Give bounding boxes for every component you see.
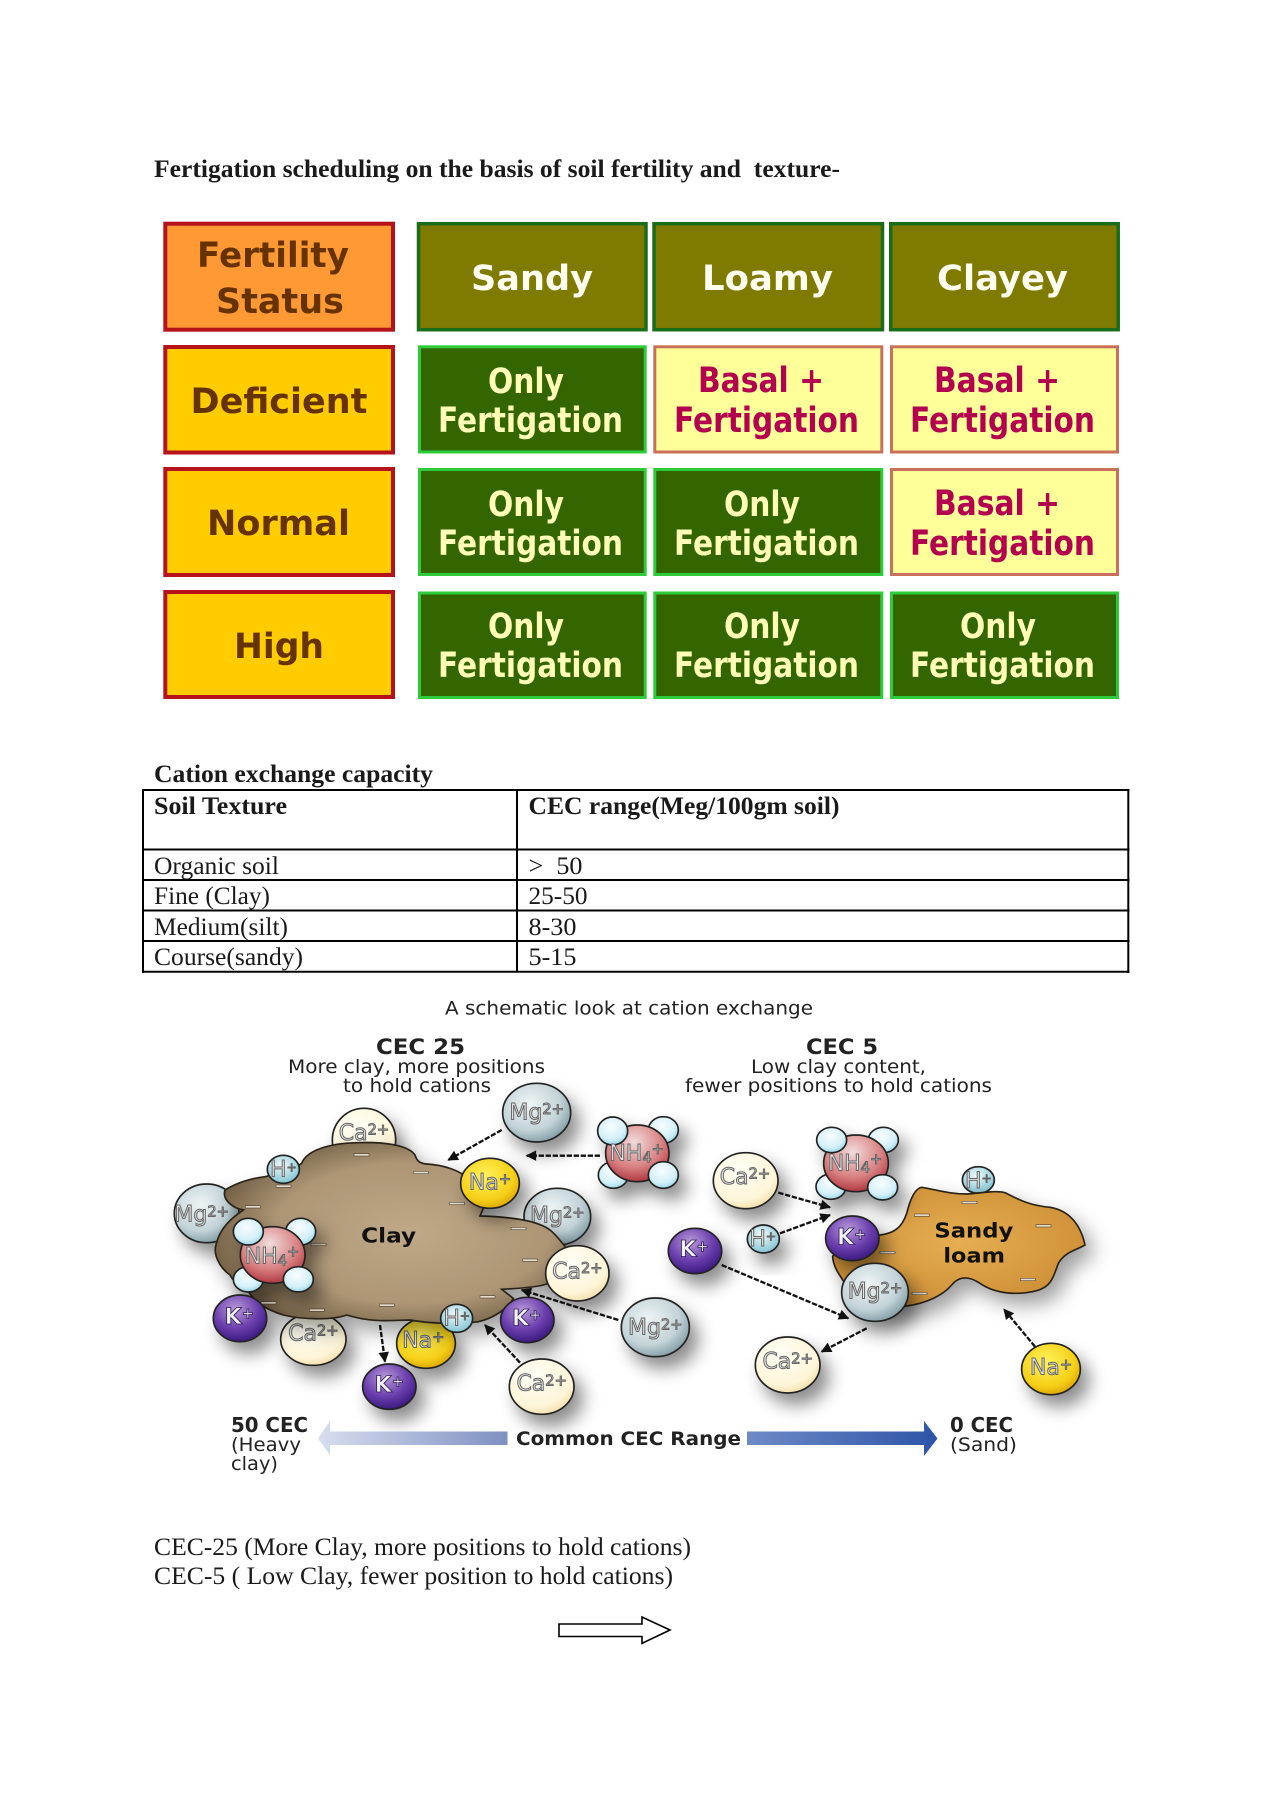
ion: Mg top: [503, 1083, 571, 1142]
table: CEC range by soil texture: 5-15: [528, 942, 576, 971]
ion: K+ right: [501, 1297, 554, 1343]
ion: Na+: Na: [1030, 1356, 1060, 1381]
arrow: Ca to sand: [778, 1193, 830, 1207]
ion: K+ bottom: [363, 1364, 416, 1409]
ion: Ca lower: [755, 1337, 820, 1393]
ion: H+ free: [747, 1225, 779, 1253]
scale label: 0 CEC sand: (Sand): [950, 1434, 1017, 1456]
heading: CEC 5 description: fewer positions to hold cations: [685, 1075, 992, 1097]
ion behind clay: Mg left: [174, 1184, 239, 1243]
ion: Ca right: Ca: [552, 1259, 581, 1284]
ion behind sand: H+: +: [982, 1172, 992, 1186]
cell: deficient loamy: Basal +: [698, 361, 824, 401]
cell: normal sandy: [420, 470, 645, 574]
heading: CEC 5 description: CEC 5: [806, 1035, 878, 1059]
table: CEC range by soil texture: [142, 790, 1130, 973]
cell: deficient clayey: Fertigation: [910, 401, 1095, 441]
heading: CEC 5 description: Low clay content,: [751, 1056, 926, 1078]
scale label: 0 CEC sand: [950, 1413, 1017, 1456]
arrow: Mg to Ca: [822, 1328, 867, 1352]
ion: H+ upper left: +: [287, 1160, 297, 1174]
table: CEC range by soil texture: 8-30: [528, 912, 576, 941]
ion: K+ right: K: [512, 1306, 529, 1331]
cell: high clayey: Only: [960, 607, 1036, 647]
panel: fertigation schedule matrix: [165, 224, 1118, 697]
cell: high clayey: Fertigation: [910, 646, 1095, 686]
heading: cation exchange capacity: Cation exchange capacity: [154, 759, 433, 788]
arrow: Na to sand: [1004, 1309, 1035, 1347]
cell: deficient clayey: [892, 347, 1118, 452]
ion: Ca upper: [713, 1153, 778, 1209]
ion: K+ lower left: +: [242, 1306, 254, 1323]
clay particle: [215, 1142, 570, 1323]
scale label: 50 CEC heavy clay: [231, 1413, 308, 1475]
scale label: 50 CEC heavy clay: clay): [231, 1453, 278, 1475]
ion: NH4+ free: 4: [642, 1150, 652, 1167]
ion: K+ bottom: +: [392, 1374, 404, 1391]
clay label: Clay: [361, 1224, 417, 1248]
heading: CEC 25 description: [288, 1035, 545, 1097]
ion: Mg top: Mg: [509, 1100, 542, 1125]
ion: NH4+: [816, 1127, 898, 1200]
table: CEC range by soil texture: Fine (Clay): [154, 881, 270, 910]
table: CEC range by soil texture: Organic soil: [154, 851, 279, 880]
arrow: Ca to clay: [485, 1325, 520, 1363]
cell: deficient sandy: Fertigation: [438, 401, 623, 441]
cell: high sandy: Fertigation: [438, 646, 623, 686]
ion: K+ bottom: K: [375, 1373, 392, 1398]
text block: CEC notes: CEC-5 ( Low Clay, fewer position to hold cations): [154, 1561, 673, 1590]
ion behind clay: Mg left: Mg: [174, 1203, 207, 1228]
cell: high loamy: Only: [724, 607, 800, 647]
ion: K+ right: +: [529, 1307, 541, 1324]
ion: Ca upper: Ca: [720, 1165, 749, 1190]
heading: CEC 5 description: [685, 1035, 992, 1097]
table: CEC range by soil texture: Medium(silt): [154, 912, 288, 941]
ion: NH4+ free: [598, 1117, 678, 1188]
cell: deficient loamy: [655, 347, 882, 452]
ion: NH4+: +: [870, 1151, 882, 1168]
cell: deficient clayey: Basal +: [934, 361, 1060, 401]
ion behind sand: H+: [962, 1167, 994, 1194]
ion: K+ free: +: [696, 1238, 709, 1255]
header: sandy: Sandy: [471, 259, 593, 299]
cell: normal loamy: Only: [724, 485, 800, 525]
scale label: 50 CEC heavy clay: 50 CEC: [231, 1413, 308, 1437]
arrow: K to sand: [722, 1265, 848, 1318]
ion: NH4+: 4: [861, 1160, 870, 1177]
ion: H+ upper left: [267, 1155, 299, 1183]
cell: normal sandy: Fertigation: [438, 524, 623, 564]
row label: high: High: [234, 627, 324, 667]
arrow: common CEC range left: [318, 1421, 508, 1455]
ion: Mg lower: Mg: [628, 1316, 661, 1341]
arrow: next page outline: [559, 1617, 670, 1643]
ion: H+ lower: [441, 1304, 473, 1332]
negative charges on sand: [880, 1201, 1051, 1295]
title: fertigation scheduling: Fertigation scheduling on the basis of soil fertility and texture-: [154, 154, 840, 183]
row label: normal: [165, 469, 393, 575]
cell: normal loamy: Fertigation: [674, 524, 859, 564]
ion: Na+: +: [1060, 1356, 1072, 1373]
ion behind clay: Ca top: Ca: [339, 1121, 368, 1146]
sandy loam label: Sandy: [934, 1218, 1014, 1242]
ion behind clay: Mg right: [524, 1188, 591, 1245]
table: CEC range by soil texture: 25-50: [528, 881, 588, 910]
diagram: sandy loam particle with cations: [668, 1127, 1085, 1395]
ion: Ca lower: 2+: [791, 1350, 813, 1367]
cell: high loamy: [655, 593, 882, 698]
cell: normal clayey: [892, 470, 1118, 574]
ion: NH4+ on clay: +: [287, 1244, 299, 1261]
table: CEC range by soil texture: Course(sandy): [154, 942, 303, 971]
ion: NH4+ free: NH: [609, 1142, 642, 1167]
arrow: Mg lower to clay: [522, 1290, 618, 1320]
ion: K+ free: [668, 1228, 722, 1274]
ion behind clay: Na bottom: Na: [402, 1328, 432, 1353]
cell: high loamy: Fertigation: [674, 646, 859, 686]
ion: K+ lower left: [213, 1295, 267, 1342]
row label: high: [165, 592, 393, 697]
ion behind clay: Mg right: Mg: [530, 1204, 563, 1229]
arrow: Mg to clay: [448, 1130, 502, 1160]
ion: H+ upper left: H: [270, 1158, 287, 1183]
ion: K+ on sand: +: [854, 1226, 866, 1243]
ion: Mg on sand: Mg: [848, 1279, 881, 1304]
ion: Ca upper: 2+: [749, 1166, 770, 1183]
ion behind clay: Ca top: [332, 1108, 396, 1172]
ion: H+ free: H: [749, 1227, 766, 1252]
ion behind sand: H+: H: [965, 1169, 982, 1194]
ion: NH4+ on clay: 4: [278, 1252, 287, 1269]
row label: normal: Normal: [207, 504, 350, 544]
diagram title: A schematic look at cation exchange: [445, 998, 813, 1020]
table: CEC range by soil texture: Soil Texture: [154, 791, 287, 820]
ion behind clay: Ca bottom: 2+: [317, 1322, 339, 1339]
row label: deficient: [165, 347, 393, 452]
ion: Ca lower: 2+: [545, 1372, 567, 1389]
sandy loam label: [934, 1218, 1014, 1268]
ion behind clay: Na bottom: +: [432, 1329, 444, 1346]
ion: K+ free: K: [679, 1238, 696, 1263]
heading: CEC 25 description: CEC 25: [376, 1035, 465, 1059]
header: loamy: Loamy: [702, 259, 833, 299]
text block: CEC notes: CEC-25 (More Clay, more positions to hold cations): [154, 1532, 691, 1561]
ion: NH4+ free: +: [652, 1141, 664, 1158]
ion: Mg lower: 2+: [661, 1316, 683, 1333]
ion: K+ on sand: [826, 1216, 879, 1261]
arrow: H to sand: [780, 1215, 830, 1233]
ion: Na+: [1022, 1343, 1080, 1395]
ion: H+ free: +: [766, 1230, 776, 1244]
cell: normal clayey: Fertigation: [910, 524, 1095, 564]
cell: high sandy: Only: [488, 607, 564, 647]
ion: K+ on sand: K: [837, 1226, 854, 1251]
scale label: 50 CEC heavy clay: (Heavy: [231, 1434, 301, 1456]
table: CEC range by soil texture: CEC range(Meg/100gm soil): [528, 791, 840, 820]
cell: high clayey: [892, 593, 1118, 698]
ion behind clay: Ca bottom: Ca: [288, 1322, 317, 1347]
header: fertility status: Status: [216, 282, 344, 322]
ion behind clay: Na bottom: [397, 1318, 455, 1368]
cell: high sandy: [420, 593, 645, 698]
ion: Ca right: [546, 1246, 609, 1301]
row label: deficient: Deficient: [190, 382, 368, 422]
ion: NH4+ on clay: [233, 1218, 316, 1292]
ion: Na+ top: [461, 1158, 519, 1208]
cell: deficient sandy: Only: [488, 362, 564, 402]
cell: deficient sandy: [420, 347, 645, 452]
arrow: clay to K: [380, 1325, 385, 1362]
header: loamy: [654, 224, 882, 330]
cell: normal loamy: [655, 470, 882, 574]
negative charges on clay: [245, 1154, 538, 1311]
ion behind clay: Mg left: 2+: [207, 1203, 229, 1220]
ion: Ca right: 2+: [581, 1260, 603, 1277]
ion: H+ lower: +: [460, 1309, 470, 1323]
header: clayey: [891, 224, 1118, 330]
header: sandy: [418, 224, 646, 330]
scale label: 0 CEC sand: 0 CEC: [950, 1413, 1013, 1437]
cell: deficient loamy: Fertigation: [674, 401, 859, 441]
arrow: common CEC range right: [747, 1421, 938, 1456]
heading: CEC 25 description: More clay, more positions: [288, 1056, 545, 1078]
header: fertility status: Fertility: [197, 236, 349, 276]
ion behind clay: Ca bottom: [281, 1313, 346, 1365]
sandy loam particle: [833, 1187, 1085, 1307]
sandy loam label: loam: [943, 1244, 1005, 1268]
ion: NH4+ on clay: NH: [245, 1244, 278, 1269]
ion: Na+ top: Na: [469, 1170, 499, 1195]
ion: Ca lower: Ca: [516, 1372, 545, 1397]
header: fertility status: [165, 224, 393, 330]
cell: normal clayey: Basal +: [934, 484, 1060, 524]
ion behind clay: Mg right: 2+: [563, 1204, 585, 1221]
ion: NH4+: NH: [828, 1152, 861, 1177]
table: CEC range by soil texture: > 50: [528, 851, 582, 880]
ion: Ca lower: [509, 1359, 574, 1414]
ion: Na+ top: +: [499, 1171, 511, 1188]
ion: Mg top: 2+: [542, 1101, 564, 1118]
arrow: NH4 to clay: [527, 1152, 600, 1159]
ion behind clay: Ca top: 2+: [368, 1122, 389, 1139]
ion: H+ lower: H: [443, 1306, 460, 1331]
heading: CEC 25 description: to hold cations: [343, 1075, 491, 1097]
diagram: clay particle with cations: [174, 1083, 689, 1414]
ion: Mg on sand: [842, 1263, 908, 1321]
ion: K+ lower left: K: [225, 1305, 242, 1330]
ion: Mg lower: [621, 1298, 689, 1357]
text block: CEC notes: [154, 1532, 691, 1590]
ion: Ca lower: Ca: [762, 1350, 791, 1375]
header: clayey: Clayey: [937, 259, 1068, 299]
scale label: common CEC range: Common CEC Range: [516, 1428, 741, 1450]
cell: normal sandy: Only: [488, 485, 564, 525]
ion: Mg on sand: 2+: [881, 1280, 902, 1297]
